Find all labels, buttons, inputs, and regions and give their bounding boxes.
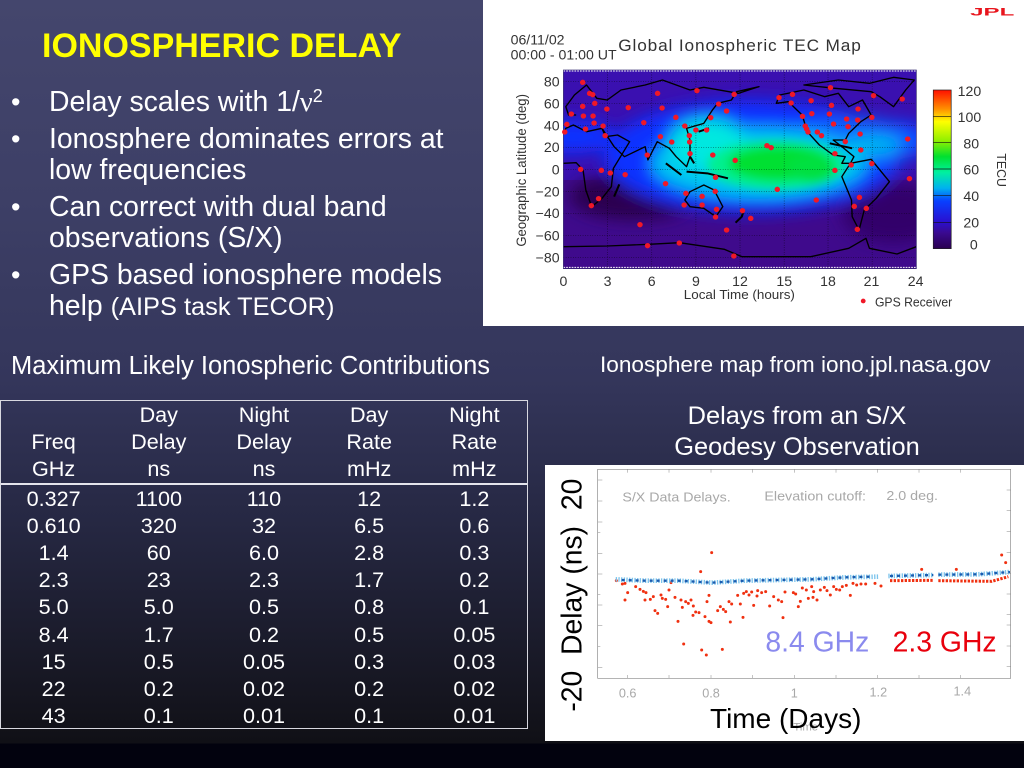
y axis labels: −40 bbox=[536, 205, 560, 221]
map caption: Ionosphere map from iono.jpl.nasa.gov bbox=[600, 352, 991, 377]
x tick labels: 1.2 bbox=[870, 686, 887, 700]
small x axis title: Time bbox=[793, 722, 818, 734]
data table: Rate bbox=[346, 429, 392, 454]
data table: 0.2 bbox=[354, 676, 384, 701]
data table: Night bbox=[449, 402, 500, 427]
data table: 1.4 bbox=[39, 540, 69, 565]
label: 8.4 GHz: 8.4 GHz bbox=[765, 626, 869, 658]
text: GPS models: help (AIPS task TECOR) bbox=[49, 290, 334, 322]
data table: 12 bbox=[357, 486, 381, 511]
x axis labels: 12 bbox=[732, 273, 748, 289]
colour scale: 40 bbox=[963, 188, 979, 204]
x tick labels: 1.4 bbox=[954, 684, 971, 698]
text: GPS models bbox=[49, 259, 442, 322]
data table: 1.2 bbox=[459, 486, 489, 511]
data table: Day bbox=[350, 402, 388, 427]
bullet: delay scaling: • bbox=[11, 87, 20, 117]
colour scale bbox=[933, 83, 1008, 253]
data table: 22 bbox=[42, 676, 66, 701]
colour scale: 80 bbox=[963, 136, 979, 151]
x axis labels: 6 bbox=[648, 273, 656, 289]
data table: 0.327 bbox=[27, 486, 81, 511]
data table: mHz bbox=[452, 456, 497, 481]
data table: ns bbox=[253, 456, 275, 481]
data table: 23 bbox=[147, 567, 171, 592]
x axis labels: 21 bbox=[864, 273, 880, 289]
data table: Delay bbox=[131, 429, 186, 454]
heat map bbox=[564, 70, 916, 268]
data table: 0.02 bbox=[243, 676, 285, 701]
x axis labels bbox=[559, 273, 924, 289]
plot frame bbox=[598, 469, 1011, 678]
delay plot heading: Geodesy Observation bbox=[674, 433, 920, 461]
data table: Night bbox=[239, 402, 289, 427]
colour scale: TECU bbox=[994, 153, 1008, 187]
x axis labels: 15 bbox=[776, 273, 792, 289]
data table: 2.3 bbox=[39, 567, 69, 592]
data table: 0.05 bbox=[453, 622, 495, 647]
bullet: GPS: • bbox=[11, 260, 20, 290]
grid bbox=[563, 70, 916, 269]
y axis labels: 80 bbox=[544, 74, 560, 89]
bullet list bbox=[11, 86, 444, 322]
data table: GHz bbox=[32, 456, 75, 481]
data table: 0.3 bbox=[354, 649, 384, 674]
data table: ns bbox=[147, 456, 170, 481]
data table: 2.8 bbox=[354, 540, 384, 565]
data table: 0.5 bbox=[354, 622, 384, 647]
data table: Freq bbox=[31, 429, 76, 454]
data table: Rate bbox=[452, 429, 497, 454]
bullet: ionosphere: • bbox=[11, 124, 20, 154]
data table: 1.7 bbox=[144, 622, 174, 647]
data table: 0.01 bbox=[243, 703, 285, 728]
label: 2.3 GHz: 2.3 GHz bbox=[893, 626, 997, 658]
x tick labels: 0.6 bbox=[619, 686, 636, 700]
data table bbox=[0, 400, 528, 729]
map title: Global Ionospheric TEC Map bbox=[618, 36, 861, 55]
y axis labels: 20 bbox=[544, 139, 560, 155]
title: IONOSPHERIC DELAY bbox=[42, 27, 402, 65]
text: dual band bbox=[49, 191, 387, 254]
GPS receiver dots bbox=[565, 82, 909, 256]
data table: 110 bbox=[247, 486, 281, 511]
data table: 0.1 bbox=[354, 703, 384, 728]
text: GPS models: GPS based ionosphere models bbox=[49, 259, 442, 291]
x axis overlay label: Time (Days) bbox=[710, 703, 861, 734]
8.4 GHz points bbox=[616, 572, 1010, 583]
text: dual band: Can correct with dual band bbox=[49, 191, 387, 223]
y axis overlay label: -20 Delay (ns) 20 bbox=[556, 479, 588, 712]
x axis labels: 18 bbox=[820, 273, 836, 289]
data table: 0.5 bbox=[249, 594, 279, 619]
data table: 1100 bbox=[136, 486, 182, 511]
plot annotation: S/X Data Delays. bbox=[622, 490, 731, 504]
x tick labels: 0.8 bbox=[702, 686, 720, 700]
x tick labels: 1 bbox=[791, 686, 798, 700]
text: ionosphere dominates: low frequencies bbox=[49, 154, 246, 186]
data table: 0.03 bbox=[453, 649, 495, 674]
text: dual band: observations (S/X) bbox=[49, 222, 283, 254]
y axis labels: −80 bbox=[536, 250, 560, 266]
data table: 0.3 bbox=[459, 540, 489, 565]
colour scale: 20 bbox=[963, 215, 979, 230]
delay plot heading: Delays from an S/X bbox=[688, 402, 906, 430]
data table: 60 bbox=[147, 540, 171, 565]
data table: 6.5 bbox=[354, 513, 384, 538]
icon: JPL logo: JPL bbox=[970, 7, 1014, 19]
data table: 15 bbox=[42, 649, 66, 674]
table heading: Maximum Likely Ionospheric Contributions bbox=[11, 352, 490, 380]
y axis labels: 0 bbox=[552, 162, 560, 177]
x axis labels: 3 bbox=[604, 273, 612, 289]
y axis labels: 40 bbox=[544, 118, 560, 133]
y axis labels: −60 bbox=[536, 228, 560, 243]
continents bbox=[563, 77, 916, 257]
data table: 8.4 bbox=[39, 622, 69, 647]
data table: mHz bbox=[347, 456, 391, 481]
y axis labels: 60 bbox=[544, 96, 560, 111]
plot annotation bbox=[622, 489, 938, 504]
TEC map figure bbox=[483, 0, 1024, 326]
data table: 0.01 bbox=[453, 703, 495, 728]
data table: 1.7 bbox=[354, 567, 384, 592]
data table: 0.5 bbox=[144, 649, 174, 674]
map timestamp: 00:00 - 01:00 UT bbox=[511, 47, 617, 63]
data table: 0.1 bbox=[459, 594, 489, 619]
data table: Delay bbox=[236, 429, 292, 454]
legend: GPS receiver: GPS Receiver bbox=[875, 295, 953, 309]
y axis labels: −20 bbox=[536, 184, 560, 199]
text: delay scales: Delay scales with 1/ν2 bbox=[49, 86, 323, 118]
y axis title: Geographic Latitude (deg) bbox=[514, 94, 529, 247]
data table: 2.3 bbox=[249, 567, 279, 592]
x tick labels bbox=[619, 684, 971, 700]
map timestamp: 06/11/02 bbox=[511, 32, 565, 47]
data table: 320 bbox=[141, 513, 177, 538]
colour scale: 0 bbox=[970, 237, 978, 253]
x axis title: Local Time (hours) bbox=[684, 287, 795, 302]
data table: 32 bbox=[252, 513, 276, 538]
text: ionosphere dominates bbox=[49, 123, 444, 186]
delay plot heading bbox=[674, 402, 920, 461]
data table: 0.6 bbox=[459, 513, 489, 538]
data table: 5.0 bbox=[39, 594, 69, 619]
data table: 5.0 bbox=[144, 594, 174, 619]
data table: 0.2 bbox=[144, 676, 174, 701]
data table: 0.05 bbox=[243, 649, 285, 674]
x axis labels: 0 bbox=[559, 273, 568, 289]
data table: 6.0 bbox=[249, 540, 279, 565]
plot annotation: Elevation cutoff: bbox=[764, 490, 866, 504]
colour scale: 120 bbox=[958, 83, 981, 99]
bullet: dual band: • bbox=[11, 192, 20, 222]
colour scale: 100 bbox=[958, 109, 981, 125]
x axis labels: 9 bbox=[692, 273, 700, 289]
data table: 0.02 bbox=[453, 676, 495, 701]
colour scale: 60 bbox=[963, 162, 979, 178]
data table: 43 bbox=[42, 703, 66, 728]
y axis labels bbox=[536, 74, 560, 266]
delay scatter plot bbox=[545, 465, 1024, 741]
data table: 0.8 bbox=[354, 594, 384, 619]
text: ionosphere dominates: Ionosphere dominates errors at bbox=[49, 123, 444, 155]
data table: 0.2 bbox=[459, 567, 489, 592]
x axis labels: 24 bbox=[908, 273, 924, 289]
data table: 0.610 bbox=[27, 513, 81, 538]
data table: 0.2 bbox=[249, 622, 279, 647]
2.3 GHz points bbox=[616, 553, 1006, 655]
plot annotation: 2.0 deg. bbox=[886, 489, 938, 503]
data table: 0.1 bbox=[144, 703, 174, 728]
data table: Day bbox=[140, 402, 178, 427]
